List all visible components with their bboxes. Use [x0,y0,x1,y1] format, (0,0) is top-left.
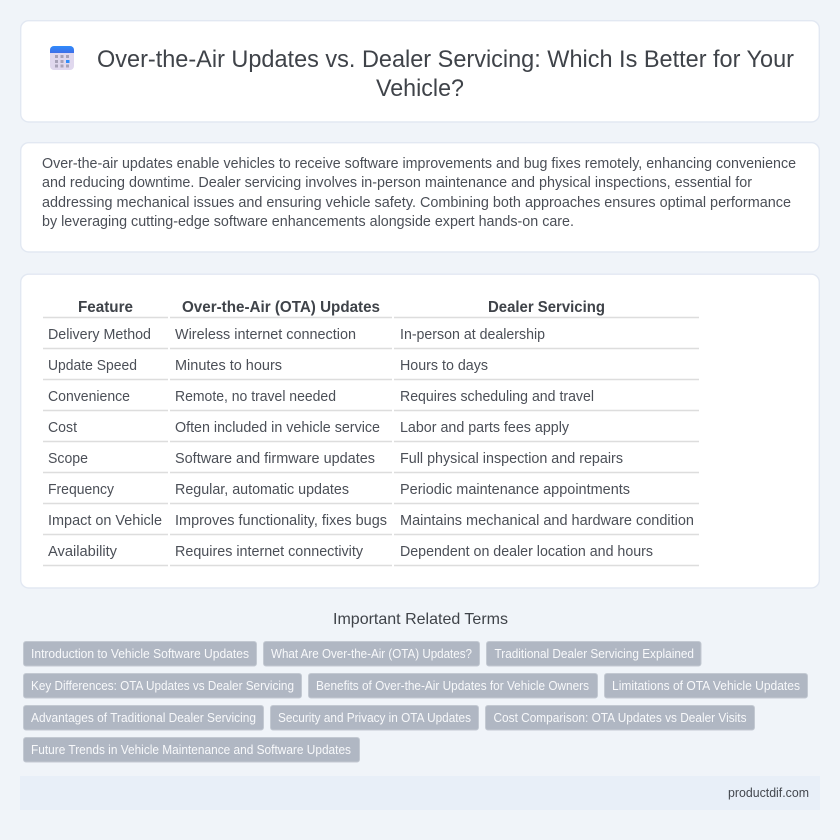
table row: availability [48,544,653,560]
table header: Over-the-Air (OTA) Updates [182,299,380,316]
table row: convenience [48,389,594,405]
table row: delivery method: Wireless internet connection [175,327,356,343]
table row: convenience: Requires scheduling and travel [400,389,594,405]
panel: comparison table [21,274,819,588]
table row: scope: Full physical inspection and repairs [400,451,623,467]
heading: important related terms: Important Related Terms [333,611,508,628]
tag: Benefits of Over-the-Air Updates for Vehicle Owners [316,679,589,693]
tag [604,674,808,698]
panel: introduction [21,143,819,252]
table row: frequency [48,482,630,498]
panel: title card [21,21,819,122]
table row: frequency: Frequency [48,482,115,498]
text block: intro paragraph: Over-the-air updates enable vehicles to receive software improvements and bug fixes remotely, enhancing convenience [42,156,796,172]
text block: intro paragraph: by leveraging cutting-edge software enhancements alongside expert hands-on care. [42,214,574,230]
table row: cost: Cost [48,420,77,436]
table row: availability: Requires internet connectivity [175,544,364,560]
tag [264,642,480,666]
table row: impact on vehicle: Impact on Vehicle [48,513,162,529]
text block: intro paragraph: addressing mechanical issues and ensuring vehicle safety. Combining both approaches ensures optimal performance [42,195,791,211]
tag [486,642,701,666]
tag [308,674,598,698]
table row: update speed: Hours to days [400,358,488,374]
text block: intro paragraph [42,156,796,230]
table row: frequency: Regular, automatic updates [175,482,349,498]
table header: Dealer Servicing [488,299,605,316]
tag [486,706,754,730]
table row: scope: Software and firmware updates [175,451,375,467]
table row: update speed: Update Speed [48,358,137,374]
table row: cost [48,420,570,436]
table row: cost: Labor and parts fees apply [400,420,570,436]
table row: convenience: Convenience [48,389,130,405]
title: Over-the-Air Updates vs. Dealer Servicing: Which Is Better for Your [97,46,794,73]
table row: scope: Scope [48,451,88,467]
table row: impact on vehicle: Maintains mechanical and hardware condition [400,513,694,529]
table row: delivery method: In-person at dealership [400,327,545,343]
tag: Traditional Dealer Servicing Explained [494,647,694,661]
table header: Feature [78,299,133,316]
tag: Future Trends in Vehicle Maintenance and Software Updates [31,743,351,757]
tag [270,706,478,730]
tag [24,642,256,666]
table row: update speed: Minutes to hours [175,358,282,374]
tag: Limitations of OTA Vehicle Updates [612,679,800,693]
footer: productdif.com [728,786,809,800]
table row: delivery method: Delivery Method [48,327,151,343]
tag: What Are Over-the-Air (OTA) Updates? [271,647,472,661]
tag: Key Differences: OTA Updates vs Dealer Servicing [31,679,294,693]
tag: Security and Privacy in OTA Updates [278,711,471,725]
table row: availability: Dependent on dealer location and hours [400,544,653,560]
table row: cost: Often included in vehicle service [175,420,380,436]
table row: availability: Availability [48,544,118,560]
tag: Cost Comparison: OTA Updates vs Dealer Visits [494,711,746,725]
table row: impact on vehicle: Improves functionality, fixes bugs [175,513,387,529]
table row: update speed [48,358,488,374]
tag [24,674,302,698]
tag: Introduction to Vehicle Software Updates [31,647,249,661]
tag [24,738,360,762]
text block: intro paragraph: and reducing downtime. Dealer servicing involves in-person maintenance and physical inspections, essential for [42,175,752,191]
table row: scope [48,451,623,467]
icon: calendar [50,46,74,70]
table row: frequency: Periodic maintenance appointments [400,482,630,498]
title [97,46,794,102]
table row: delivery method [48,327,545,343]
table header [78,299,605,316]
table row: convenience: Remote, no travel needed [175,389,336,405]
tag: Advantages of Traditional Dealer Servicing [31,711,256,725]
tags: related terms [24,642,808,762]
tag [24,706,264,730]
footer [20,776,820,810]
title: Vehicle? [376,75,464,102]
table row: impact on vehicle [48,513,694,529]
